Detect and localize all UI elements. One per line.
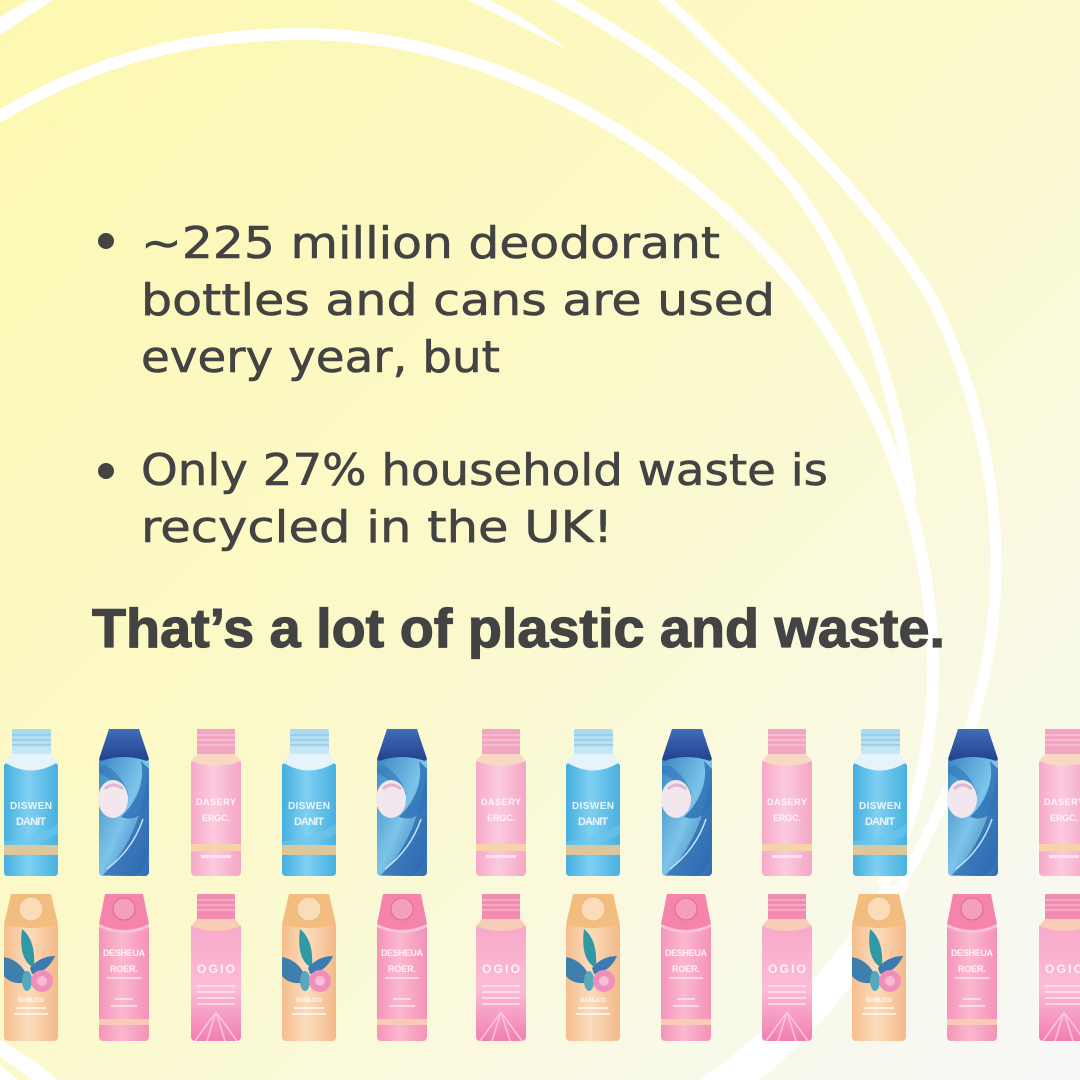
bottle: peach: BASILICO <box>580 998 606 1004</box>
bullet point 1: ~225 million deodorant <box>141 218 720 269</box>
bottle: pink rays: OGIO <box>482 962 520 976</box>
bottle: light blue: DANIT <box>865 816 895 828</box>
bottle: pale pink: ERGC. <box>487 813 515 823</box>
bottle: bright pink <box>661 894 711 1041</box>
bottle: bright pink <box>99 894 149 1041</box>
bottle: peach <box>566 894 620 1041</box>
bottle: dark blue <box>376 729 427 876</box>
bottle: bright pink: DESHEUA <box>665 948 708 958</box>
bullet point 2: recycled in the UK! <box>141 502 613 553</box>
bottle: peach: BASILICO <box>296 998 322 1004</box>
bottle: pink rays: OGIO <box>197 962 235 976</box>
bottle: pale pink <box>191 729 241 876</box>
bold conclusion heading: That’s a lot of plastic and waste. <box>92 597 945 659</box>
bottle: pale pink <box>762 729 812 876</box>
bottle: light blue: DISWEN <box>10 801 52 812</box>
bottle: peach <box>4 894 58 1041</box>
bottle: light blue <box>853 729 907 876</box>
bottle: light blue: DANIT <box>16 816 46 828</box>
bottle: pale pink <box>1039 729 1080 876</box>
bottle: peach: BASILICO <box>866 998 892 1004</box>
bottle: bright pink <box>947 894 997 1041</box>
bullet point 1: every year, but <box>141 332 500 383</box>
bottle: light blue: DISWEN <box>572 801 614 812</box>
bullet point 2 <box>98 445 828 553</box>
bullet point 1: bottles and cans are used <box>141 275 775 326</box>
bottle: bright pink: ROER. <box>958 964 986 974</box>
bottle: pale pink <box>476 729 526 876</box>
bottle: pale pink: ERGC. <box>202 813 230 823</box>
bottle: pink rays <box>476 894 526 1041</box>
bottle: bright pink: ROER. <box>672 964 700 974</box>
bottle: pale pink: DASERY <box>481 797 521 807</box>
bottle: bright pink: ROER. <box>110 964 138 974</box>
bullet point 1 <box>98 218 775 383</box>
bottle: light blue: DANIT <box>294 816 324 828</box>
bullet list <box>98 218 828 553</box>
bottle: bright pink <box>377 894 427 1041</box>
bullet point 2: Only 27% household waste is <box>141 445 828 496</box>
bottle: dark blue <box>947 729 998 876</box>
bottle: pale pink: DASERY <box>767 797 807 807</box>
bottle: pale pink: ERGC. <box>1050 813 1078 823</box>
bottle: dark blue <box>98 729 149 876</box>
bottle: light blue: DISWEN <box>859 801 901 812</box>
bottle: peach <box>852 894 906 1041</box>
bottle: light blue <box>282 729 336 876</box>
bottle: pink rays <box>762 894 812 1041</box>
bottle: peach <box>282 894 336 1041</box>
bottle: pink rays <box>1039 894 1080 1041</box>
bottle: dark blue <box>661 729 712 876</box>
bottle: peach: BASILICO <box>18 998 44 1004</box>
bottle: bright pink: DESHEUA <box>951 948 994 958</box>
row 1 of deodorant bottles <box>4 729 1080 876</box>
bottle: pink rays: OGIO <box>768 962 806 976</box>
bottle: pale pink: ERGC. <box>773 813 801 823</box>
bottle: light blue: DISWEN <box>288 801 330 812</box>
row 2 of deodorant bottles <box>4 894 1080 1041</box>
bottle: bright pink: DESHEUA <box>103 948 146 958</box>
bottle: bright pink: ROER. <box>388 964 416 974</box>
bottle: pink rays <box>191 894 241 1041</box>
bottle: light blue <box>4 729 58 876</box>
bottle: light blue: DANIT <box>578 816 608 828</box>
bottle: bright pink: DESHEUA <box>381 948 424 958</box>
bottle: light blue <box>566 729 620 876</box>
bottle: pale pink: DASERY <box>196 797 236 807</box>
